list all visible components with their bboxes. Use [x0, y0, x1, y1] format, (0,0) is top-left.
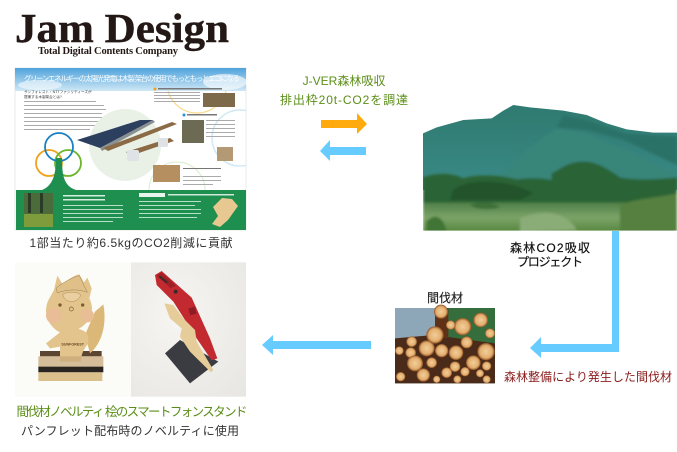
- clear acrylic base: [38, 356, 103, 367]
- flyer venn diagram: [36, 133, 81, 176]
- meadow grass: [423, 203, 677, 233]
- panel: flyer pamphlet: [14, 68, 246, 230]
- label: forest CO2 project: 森林CO2吸収: [510, 240, 590, 255]
- flyer tree trunk: [42, 158, 76, 190]
- label: J-VER purchase: 排出枠20t-CO2を調達: [280, 93, 408, 107]
- tree line: [423, 162, 677, 205]
- label: J-VER purchase: J-VER森林吸収: [303, 73, 385, 88]
- flyer right column: callouts and photos: [148, 88, 246, 190]
- red phone: [155, 271, 217, 360]
- label: forest CO2 project: プロジェクト: [517, 255, 583, 269]
- label: J-VER purchase: [280, 73, 408, 107]
- flyer intro text: サンフォレスト・NTTファシリティーズが: [24, 89, 92, 94]
- flyer solar panel illustration: [77, 109, 177, 181]
- photo: phone on stand: [131, 262, 246, 397]
- flyer intro text: 提案する木製架台とは?: [24, 94, 62, 99]
- arrow: blue elbow: [530, 231, 619, 358]
- arrow: blue left: [320, 140, 366, 161]
- label: wood from forest maintenance: 森林整備により発生した間伐材: [504, 369, 672, 384]
- label: thinned wood: 間伐材: [427, 291, 463, 305]
- flyer green footer band: [16, 190, 246, 230]
- black acrylic base: [165, 340, 218, 383]
- photo: log pile: [395, 305, 495, 383]
- logo: Jam Design: Jam Design: [15, 5, 229, 51]
- arrow: blue left lower: [262, 335, 371, 355]
- flyer intro text: [24, 89, 106, 130]
- logo: Jam Design: Total Digital Contents Company: [38, 46, 179, 57]
- squirrel figure: SUNFOREST: [61, 343, 85, 347]
- arrow: orange right: [321, 113, 367, 134]
- flyer header band: グリーンエネルギーの太陽光発電は木製 架台の使用でもっともっとエコになる: [24, 74, 240, 83]
- mountain ridge shading: [514, 175, 669, 178]
- caption: flyer CO2 reduction: 1部当たり約6.5kgのCO2削減に貢献: [30, 235, 232, 250]
- label: forest CO2 project: [510, 240, 590, 269]
- caption: novelty smartphone stand: 間伐材ノベルティ 桧のスマートフォンスタンド: [16, 405, 248, 419]
- photo: forest mountain: [423, 105, 677, 233]
- mountain silhouette: [423, 105, 677, 190]
- flyer header band: [15, 68, 247, 91]
- wooden squirrel side view: [164, 303, 213, 372]
- photo: squirrel wooden stand: [15, 262, 131, 397]
- log ends: [395, 305, 495, 383]
- caption: pamphlet novelty use: パンフレット配布時のノベルティに使用: [21, 423, 239, 438]
